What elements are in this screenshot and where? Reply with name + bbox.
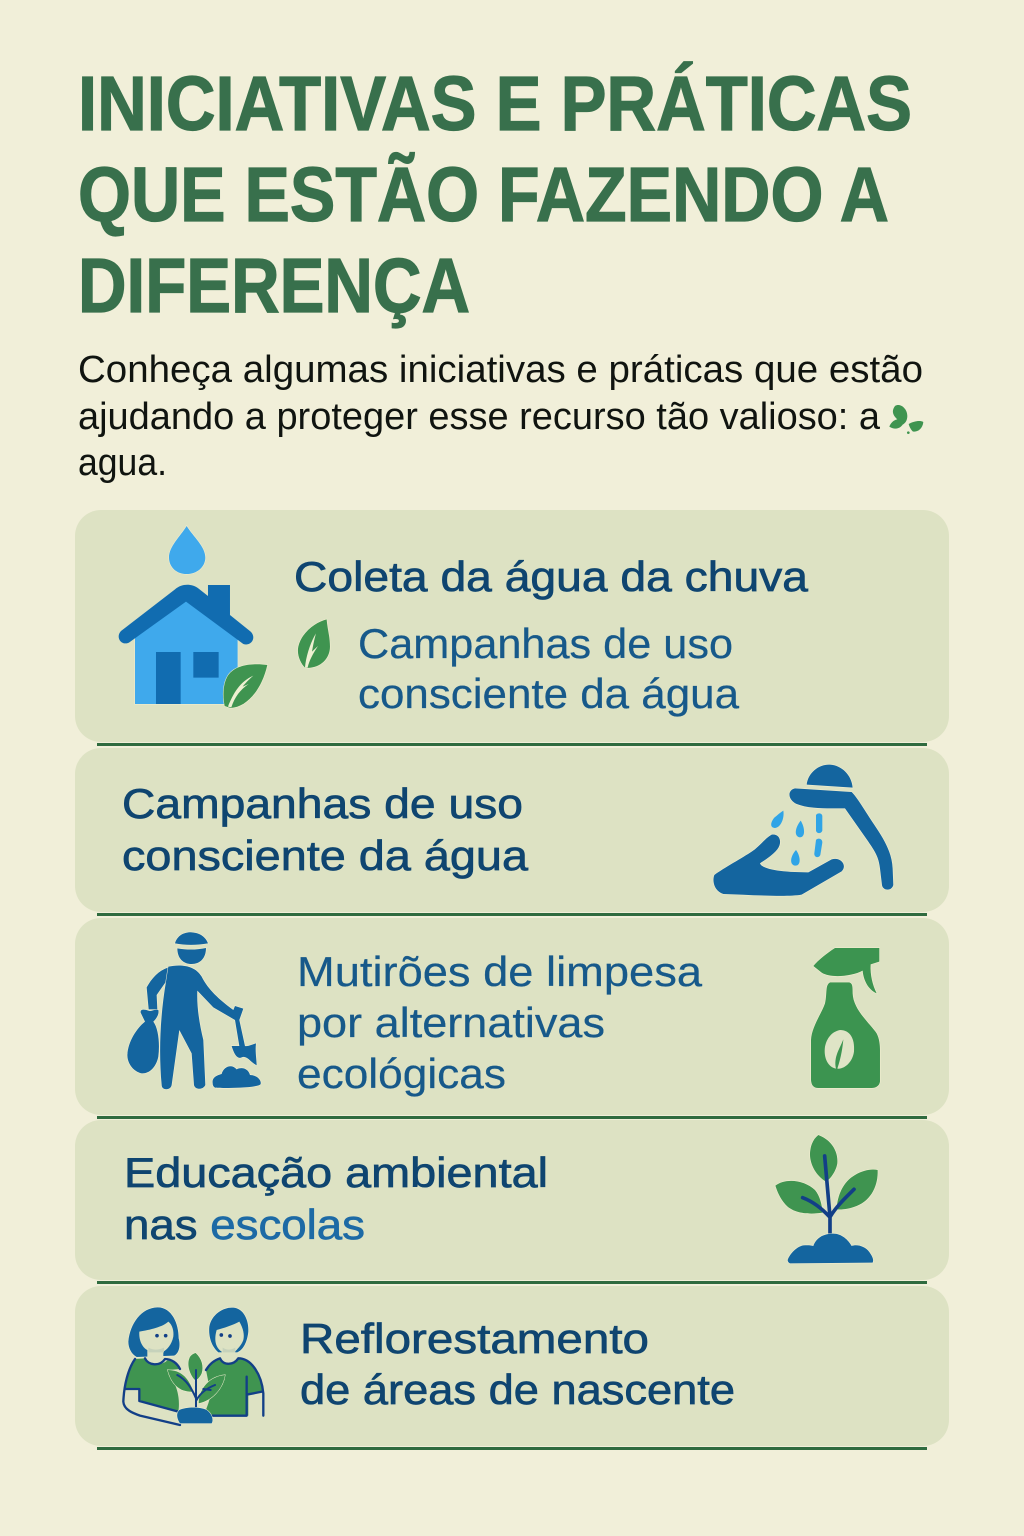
panel: mutirões de limpeza: por alternativas — [297, 999, 605, 1046]
panel: reflorestamento: de áreas de nascente — [300, 1366, 735, 1413]
panel: campanhas de uso consciente: Campanhas de uso — [122, 780, 523, 827]
panel: coleta da água da chuva: Coleta da água da chuva — [294, 553, 809, 600]
panel: campanhas de uso consciente — [75, 748, 949, 916]
title: DIFERENÇA — [78, 243, 470, 329]
title — [78, 60, 912, 329]
icon: worker collecting waste — [127, 932, 261, 1089]
panel: educação ambiental: nas escolas — [124, 1201, 365, 1248]
panel: reflorestamento — [75, 1286, 949, 1450]
panel: educação ambiental: Educação ambiental — [124, 1149, 548, 1196]
title: INICIATIVAS E PRÁTICAS — [78, 60, 912, 147]
intro text: ajudando a proteger esse recurso tão valioso: a — [78, 396, 881, 438]
icon: house with water drop — [119, 526, 267, 708]
icon: spray bottle — [811, 948, 880, 1088]
panel: mutirões de limpeza: ecológicas — [297, 1050, 506, 1097]
panel: mutirões de limpeza — [75, 918, 949, 1119]
icon: hand under tap — [713, 765, 893, 896]
panel: coleta da água da chuva: Campanhas de uso — [358, 620, 733, 667]
intro text — [78, 349, 923, 484]
icon: leaf — [298, 619, 330, 668]
panel: educação ambiental — [75, 1120, 949, 1284]
title: QUE ESTÃO FAZENDO A — [78, 151, 889, 238]
panel: coleta da água da chuva — [75, 510, 949, 746]
icon: two people planting — [123, 1307, 263, 1425]
panel: coleta da água da chuva: consciente da água — [358, 670, 740, 717]
panel: mutirões de limpeza: Mutirões de limpesa — [297, 948, 703, 995]
intro text: agua. — [78, 442, 167, 484]
panel: reflorestamento: Reflorestamento — [300, 1315, 649, 1362]
panel: campanhas de uso consciente: consciente da água — [122, 832, 529, 879]
intro text: Conheça algumas iniciativas e práticas que estão — [78, 349, 923, 391]
icon: small leaves — [889, 405, 923, 434]
icon: seedling — [775, 1135, 878, 1263]
